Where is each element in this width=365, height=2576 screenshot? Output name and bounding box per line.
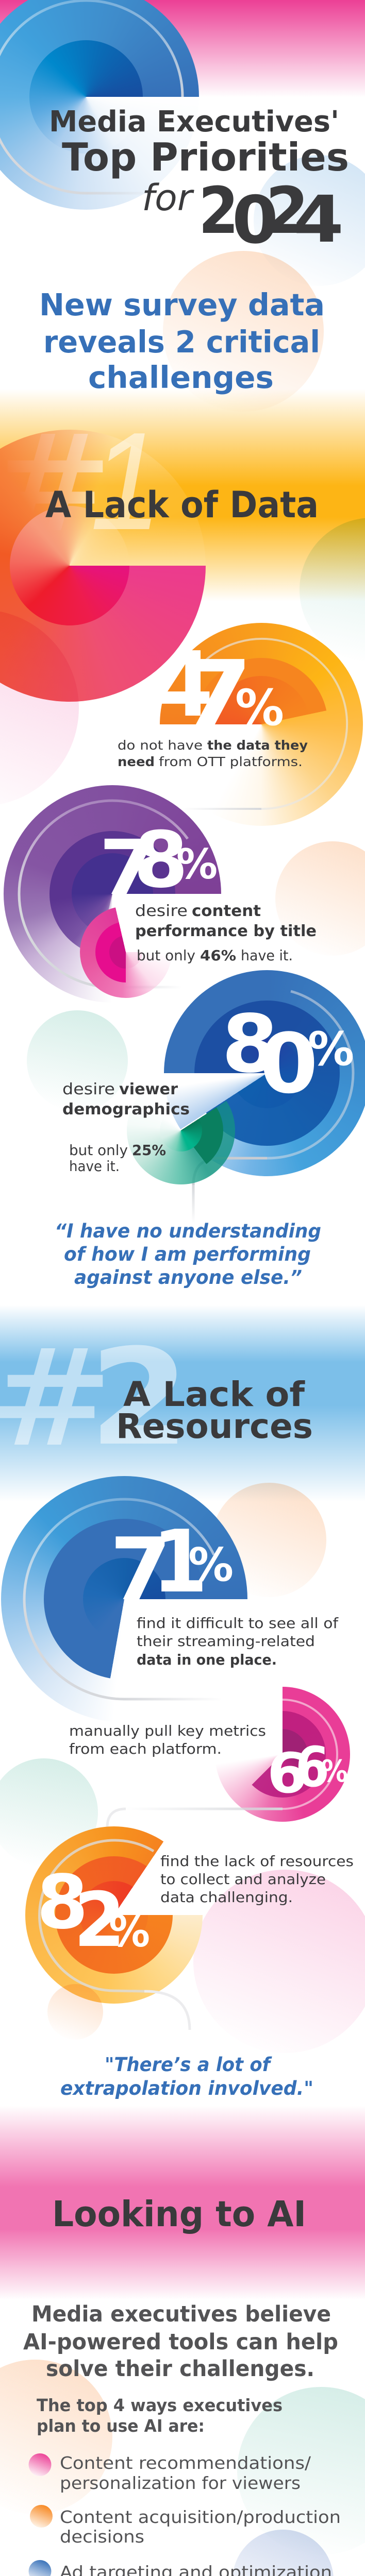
pink pie mid xyxy=(239,1711,326,1798)
orange pie outer xyxy=(160,623,363,826)
78% caption: content xyxy=(192,902,261,920)
78% number: % xyxy=(176,840,218,888)
intro text xyxy=(23,2301,338,2382)
pale fan under the cut xyxy=(164,970,365,1176)
82% caption: to collect and analyze xyxy=(160,1871,326,1888)
78% number xyxy=(99,816,218,912)
heading: a lack of resources: A Lack of xyxy=(123,1375,305,1414)
66% number: 6 xyxy=(267,1742,307,1806)
orange pie inner xyxy=(80,1881,148,1949)
80% caption: but only xyxy=(69,1142,128,1159)
82% number: 2 xyxy=(74,1876,125,1964)
47% caption: do not have xyxy=(118,738,203,753)
78% caption: 46% xyxy=(200,947,236,964)
heading: looking to AI: Looking to AI xyxy=(52,2194,306,2235)
orange pie inner xyxy=(213,676,310,773)
80% caption: 25% xyxy=(132,1142,166,1159)
quote 2 xyxy=(60,2054,313,2099)
80% caption: desire xyxy=(62,1080,115,1098)
subtitle: challenges xyxy=(88,360,274,395)
quote 1 xyxy=(55,1220,321,1289)
blue pie outer xyxy=(1,1476,247,1722)
66% caption: from each platform. xyxy=(69,1740,222,1757)
pink background band xyxy=(0,2106,365,2300)
78% caption: have it. xyxy=(241,947,293,964)
47% number: 7 xyxy=(180,641,253,746)
pale peach circle xyxy=(212,1483,326,1597)
pale periwinkle circle xyxy=(233,2530,334,2576)
stat: 47% xyxy=(118,623,363,826)
list item 2: decisions xyxy=(60,2527,144,2547)
green pie inner xyxy=(160,1109,202,1151)
decorative blue pie, outer ring xyxy=(0,0,199,210)
list item 1: Content recommendations/ xyxy=(60,2453,311,2473)
list item 1: personalization for viewers xyxy=(60,2473,301,2493)
heading: a lack of resources xyxy=(116,1375,313,1446)
quote 1: of how I am performing xyxy=(64,1243,311,1265)
stat: 82% xyxy=(25,1826,365,2053)
47% number: 4 xyxy=(154,633,213,737)
decorative red pie, inner ring xyxy=(10,506,129,625)
pale pink circle xyxy=(0,609,79,806)
71% number xyxy=(110,1512,234,1620)
71% caption xyxy=(137,1615,339,1668)
80% number xyxy=(222,997,354,1112)
stat: 80% xyxy=(27,970,365,1224)
purple pie outer xyxy=(4,785,221,1003)
pale green circle xyxy=(27,1010,128,1111)
66% caption: manually pull key metrics xyxy=(69,1722,266,1739)
blue pie outer xyxy=(164,970,365,1176)
stat: 71% xyxy=(1,1476,339,1722)
panel: challenge 2 - a lack of resources xyxy=(0,1320,365,2099)
pale peach circle xyxy=(275,841,365,956)
47% number: % xyxy=(235,679,284,737)
ring line xyxy=(181,639,347,810)
blue pie mid xyxy=(194,1001,340,1146)
71% caption: find it difficult to see all of xyxy=(137,1615,339,1632)
pale green circle xyxy=(300,518,365,662)
list heading: The top 4 ways executives xyxy=(37,2395,283,2415)
47% number xyxy=(154,633,284,746)
orange background band xyxy=(0,389,365,601)
stat: 78% xyxy=(4,785,365,1003)
78% caption xyxy=(135,902,317,964)
82% caption: find the lack of resources xyxy=(160,1853,354,1870)
ring line xyxy=(24,1499,222,1700)
orange pie mid xyxy=(55,1856,173,1974)
big number #1: 1 xyxy=(90,404,162,559)
pale peach circle xyxy=(0,2360,112,2514)
big number #2: 2 xyxy=(89,1320,190,1475)
66% number xyxy=(267,1736,348,1806)
71% number: 1 xyxy=(152,1512,208,1612)
blue pie mid xyxy=(44,1519,205,1680)
orange pie mid xyxy=(195,658,328,791)
intro text: AI-powered tools can help xyxy=(23,2329,338,2355)
78% caption: but only xyxy=(137,947,195,964)
orange pie outer xyxy=(25,1826,203,2004)
pale pink circle xyxy=(193,1870,365,2053)
78% caption: desire xyxy=(135,902,188,920)
subtitle: New survey data xyxy=(39,287,325,323)
pale green circle xyxy=(237,2387,365,2555)
list heading xyxy=(37,2395,283,2436)
decorative ring line xyxy=(0,1,182,195)
big number #2 xyxy=(0,1320,190,1475)
list item 1 xyxy=(29,2453,311,2493)
71% number: % xyxy=(188,1538,234,1591)
ring line xyxy=(192,991,353,1224)
green pie outer xyxy=(127,1076,235,1184)
intro text: Media executives believe xyxy=(31,2301,331,2327)
panel: header xyxy=(0,0,365,412)
title: 0 xyxy=(232,182,278,258)
list item 2: Content acquisition/production xyxy=(60,2507,341,2527)
quote 2: "There’s a lot of xyxy=(105,2054,272,2076)
pale green circle xyxy=(0,1758,98,1867)
78% caption: performance by title xyxy=(135,922,317,940)
80% caption: demographics xyxy=(62,1100,190,1118)
66% number: 6 xyxy=(295,1736,329,1800)
71% number: 7 xyxy=(110,1520,172,1620)
71% caption: data in one place. xyxy=(137,1651,277,1668)
pink pie outer xyxy=(215,1687,350,1822)
subtitle: reveals 2 critical xyxy=(43,324,320,360)
title: 2 xyxy=(198,174,239,248)
green pie mid xyxy=(139,1088,223,1173)
decorative blue pie, inner ring xyxy=(29,40,143,154)
80% caption: viewer xyxy=(119,1080,178,1098)
80% number: 0 xyxy=(259,1015,318,1112)
pale peach background circle xyxy=(163,251,324,412)
list item 2 xyxy=(30,2505,341,2547)
82% caption: data challenging. xyxy=(160,1889,293,1906)
subtitle xyxy=(39,287,325,395)
78% number: 7 xyxy=(99,824,157,912)
78% number: 8 xyxy=(134,816,188,905)
list heading: plan to use AI are: xyxy=(37,2416,205,2436)
pale blue background circle xyxy=(254,155,365,286)
82% number: 8 xyxy=(37,1859,88,1945)
title: Top Priorities xyxy=(62,134,349,180)
blue pie inner xyxy=(232,1038,302,1108)
stat: 66% xyxy=(0,1687,350,1867)
82% number: % xyxy=(109,1906,150,1957)
80% number: 8 xyxy=(222,997,278,1091)
title: 4 xyxy=(293,182,344,257)
small peach circle xyxy=(47,1984,103,2040)
47% caption: need xyxy=(118,754,155,769)
ring line xyxy=(19,801,188,988)
80% caption xyxy=(62,1080,190,1175)
title xyxy=(49,105,349,258)
pink pie inner xyxy=(95,922,156,982)
80% caption: have it. xyxy=(69,1158,120,1175)
purple pie mid xyxy=(49,831,175,957)
66% number: % xyxy=(321,1753,348,1789)
blue pie inner xyxy=(83,1558,165,1640)
panel: looking to AI xyxy=(0,2194,365,2576)
title: 2 xyxy=(266,174,309,248)
purple pie inner xyxy=(72,853,153,935)
66% caption xyxy=(69,1722,266,1757)
47% caption xyxy=(118,738,308,769)
top pink background band xyxy=(0,0,365,97)
ring line xyxy=(40,1840,190,2030)
80% number: % xyxy=(308,1022,354,1076)
blue background band xyxy=(0,1305,365,1502)
title: for xyxy=(142,177,194,219)
big number #1 xyxy=(0,404,162,561)
heading: a lack of resources: Resources xyxy=(116,1406,313,1446)
quote 2: extrapolation involved." xyxy=(60,2077,313,2099)
panel: challenge 1 - a lack of data xyxy=(0,404,365,1289)
quote 1: “I have no understanding xyxy=(55,1220,321,1242)
pink pie outer xyxy=(80,906,172,998)
71% caption: their streaming-related xyxy=(137,1633,315,1650)
title: Media Executives' xyxy=(49,105,339,139)
intro text: solve their challenges. xyxy=(46,2356,314,2382)
quote 1: against anyone else.” xyxy=(74,1266,302,1289)
pink pie inner xyxy=(257,1729,308,1780)
47% caption: from OTT platforms. xyxy=(159,754,303,769)
82% caption xyxy=(160,1853,354,1906)
ring line xyxy=(107,1700,337,1827)
heading: a lack of data: A Lack of Data xyxy=(45,484,319,526)
82% number xyxy=(37,1859,150,1964)
pink pie core xyxy=(109,936,142,969)
decorative red pie, outer ring xyxy=(0,430,206,702)
47% caption: the data they xyxy=(207,738,308,753)
